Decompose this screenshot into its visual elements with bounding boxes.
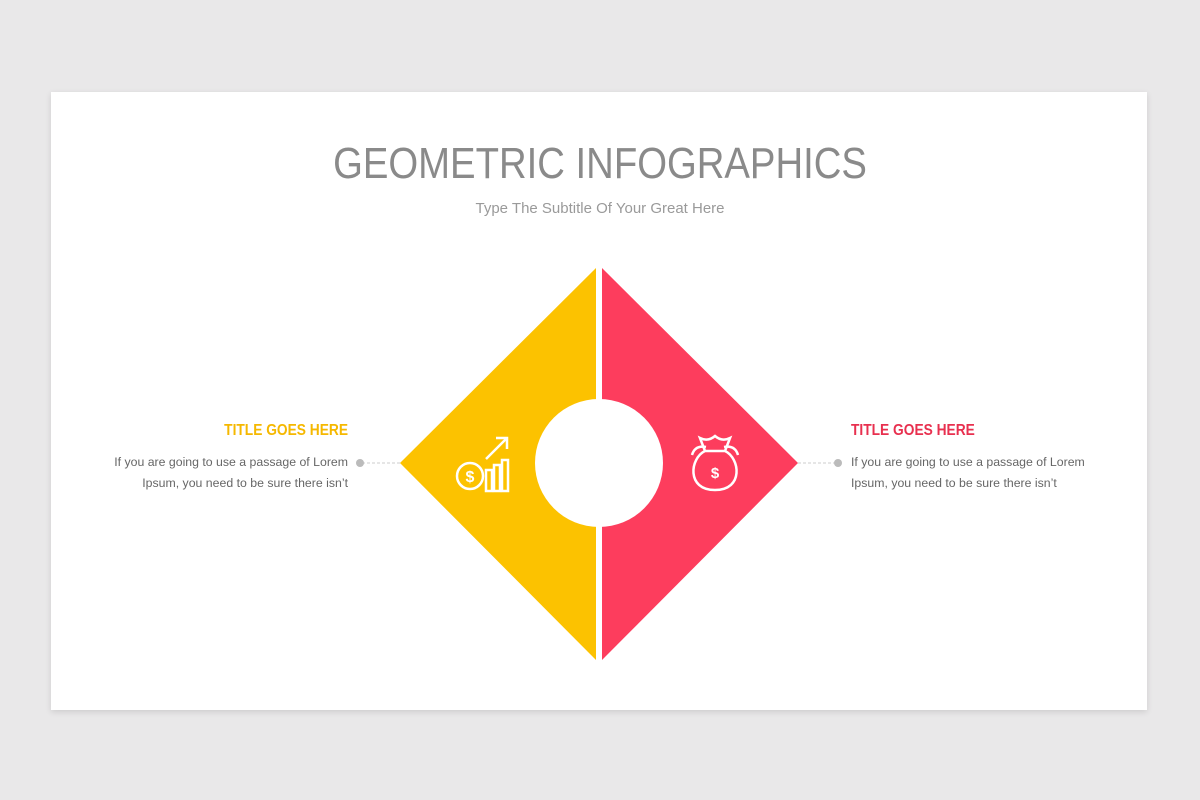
left body	[114, 455, 348, 490]
connector left	[356, 459, 400, 467]
card panel	[51, 92, 1147, 710]
yellow half	[400, 268, 596, 660]
subtitle: Type The Subtitle Of Your Great Here	[475, 200, 725, 217]
right body: If you are going to use a passage of Lorem	[851, 455, 1085, 469]
left heading: TITLE GOES HERE	[224, 422, 348, 439]
left body: If you are going to use a passage of Lorem	[114, 455, 348, 469]
red half	[602, 268, 798, 660]
right text block	[851, 422, 1085, 490]
connector right	[798, 459, 842, 467]
left text block	[114, 422, 348, 490]
icon: coin growth: $	[466, 469, 475, 486]
center circle	[535, 399, 663, 527]
icon: coin growth	[457, 438, 508, 491]
icon: money bag	[692, 436, 738, 490]
title: GEOMETRIC INFOGRAPHICS	[333, 139, 867, 188]
right body	[851, 455, 1085, 490]
icon: money bag: $	[711, 465, 720, 482]
left body: Ipsum, you need to be sure there isn’t	[142, 476, 348, 490]
right body: Ipsum, you need to be sure there isn’t	[851, 476, 1057, 490]
right heading: TITLE GOES HERE	[851, 422, 975, 439]
